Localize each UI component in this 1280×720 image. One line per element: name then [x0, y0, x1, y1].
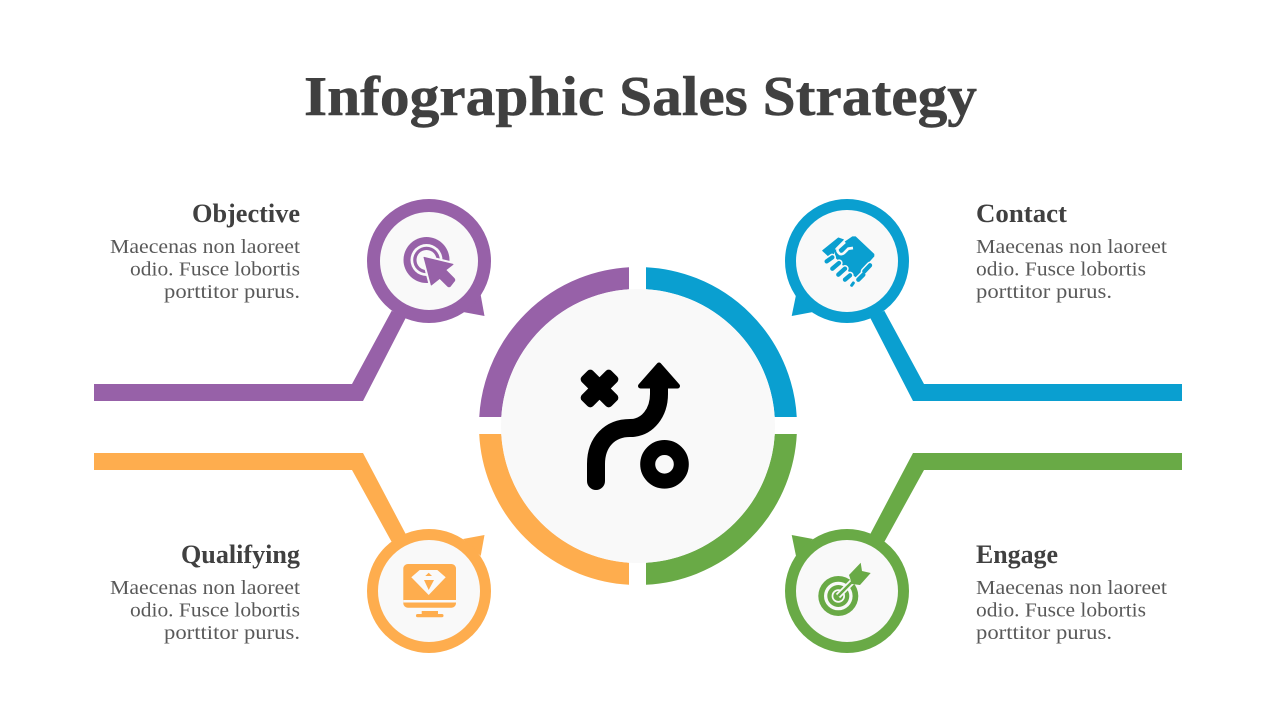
icon: dart target: [818, 563, 871, 616]
body text: Maecenas non laoreet: [976, 236, 1167, 258]
heading: Contact: [976, 199, 1067, 228]
body text: porttitor purus.: [976, 622, 1112, 644]
title: Infographic Sales Strategy: [304, 66, 977, 128]
panel: objective: [94, 199, 484, 401]
connector line: [94, 453, 406, 542]
connector line: [870, 453, 1182, 542]
ring segment: orange: [479, 434, 629, 585]
panel: contact: [790, 199, 1182, 401]
icon: diamond monitor: [403, 564, 456, 617]
connector line: [94, 311, 406, 401]
center disc: [501, 289, 775, 563]
callout pin: [790, 204, 904, 318]
body text: [110, 577, 300, 644]
body text: odio. Fusce lobortis: [130, 258, 300, 280]
body text: [976, 236, 1167, 303]
connector line: [870, 311, 1182, 401]
body text: odio. Fusce lobortis: [976, 258, 1146, 280]
center hub: [490, 278, 786, 574]
body text: odio. Fusce lobortis: [130, 600, 300, 622]
callout pin: [374, 206, 484, 316]
body text: [976, 577, 1167, 644]
panel: engage: [790, 453, 1182, 648]
heading: Objective: [192, 199, 300, 228]
panel: qualifying: [94, 453, 486, 648]
callout pin: [372, 534, 486, 648]
ring segment: purple: [479, 267, 629, 417]
body text: porttitor purus.: [976, 281, 1112, 303]
callout pin: [790, 534, 904, 648]
ring segment: green: [646, 434, 797, 585]
body text: Maecenas non laoreet: [976, 577, 1167, 599]
icon: target click: [404, 237, 455, 287]
heading: Engage: [976, 540, 1058, 569]
body text: porttitor purus.: [164, 281, 300, 303]
body text: Maecenas non laoreet: [110, 236, 300, 258]
body text: [110, 236, 300, 303]
ring segment: blue: [646, 267, 797, 417]
body text: Maecenas non laoreet: [110, 577, 300, 599]
icon: handshake: [823, 236, 874, 285]
body text: porttitor purus.: [164, 622, 300, 644]
body text: odio. Fusce lobortis: [976, 600, 1146, 622]
heading: Qualifying: [181, 540, 300, 569]
icon: strategy play: [570, 359, 681, 481]
